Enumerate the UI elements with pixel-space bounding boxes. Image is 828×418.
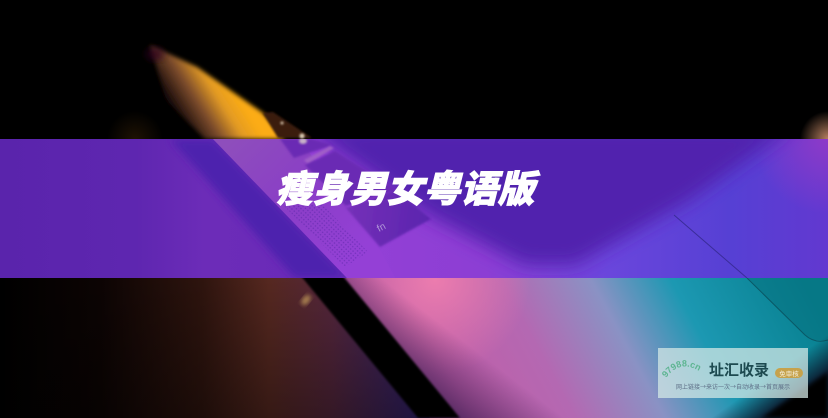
title: 瘦身男女粤语版 [273, 159, 545, 213]
brown glow [114, 119, 155, 139]
surface shade along stripe [344, 278, 554, 418]
band left base [0, 139, 347, 278]
black stripe laptop edge [296, 270, 460, 418]
speaker dots [282, 204, 368, 267]
yellow wedge [150, 45, 285, 139]
stripe highlight [299, 293, 313, 307]
key above fn [305, 151, 396, 206]
bottom right black corner [762, 372, 828, 418]
trackpad shade [747, 278, 828, 340]
band top right glow [768, 139, 828, 200]
lower left dark panel [68, 278, 418, 418]
watermark heading: 址汇收录 [709, 359, 769, 380]
magenta tip [146, 48, 164, 60]
small upper key [280, 139, 332, 158]
watermark domain: 97988.cn [662, 360, 700, 377]
watermark tag [775, 368, 803, 378]
watermark tag: 免审核 [779, 368, 799, 378]
trackpad line in band [674, 215, 747, 278]
dark upper keyboard region [300, 125, 795, 265]
dark diagonal stripe [170, 139, 347, 278]
peach glow right [802, 112, 828, 139]
purple title band [0, 125, 828, 278]
pink glow [356, 278, 518, 354]
key row strip [263, 112, 312, 138]
lit laptop wedge [213, 139, 348, 278]
trackpad outline [747, 278, 828, 341]
key light mark [299, 138, 307, 144]
upper area: yellow laptop edge [100, 45, 828, 139]
key light dots [280, 122, 305, 139]
watermark badge [658, 348, 808, 398]
key separator highlight [304, 146, 334, 164]
lit laptop surface [342, 278, 828, 418]
band lit base [200, 139, 828, 278]
fn key [346, 190, 431, 247]
bottom right shade [714, 338, 828, 418]
lower area [68, 278, 828, 418]
lower left fade [132, 314, 430, 418]
watermark tagline: 网上链接→来访一次→自动收录→首页展示 [676, 382, 790, 391]
fn key label: fn [375, 221, 388, 235]
